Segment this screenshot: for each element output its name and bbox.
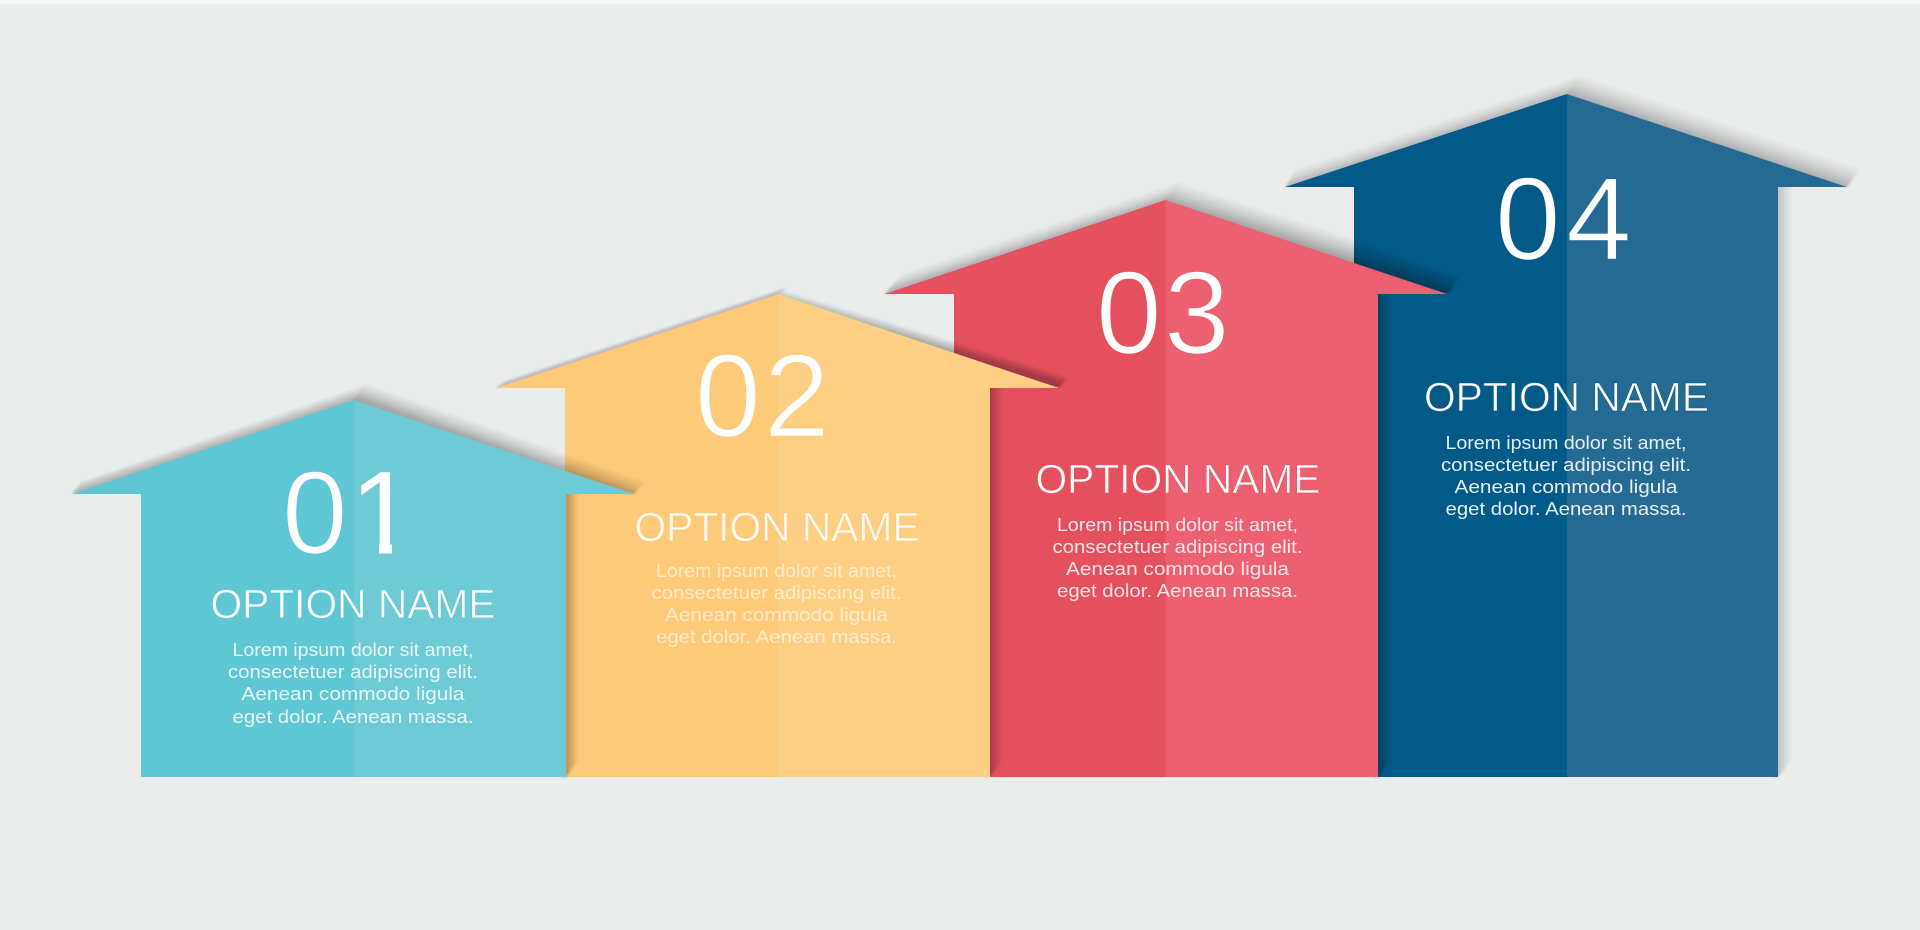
number 03: 0 xyxy=(1096,248,1162,380)
number 04: 0 xyxy=(1495,154,1561,286)
panel: arrow 03 xyxy=(884,180,1459,777)
number 04 xyxy=(1495,154,1632,286)
arrow 02 shape xyxy=(496,294,1059,777)
text block 02: Aenean commodo ligula xyxy=(665,604,889,625)
text block 01: Aenean commodo ligula xyxy=(242,683,465,704)
heading: option name 04: OPTION NAME xyxy=(1424,374,1709,420)
text block 01: consectetuer adipiscing elit. xyxy=(228,661,478,682)
arrow 01 shape xyxy=(72,400,634,777)
text block 01 xyxy=(228,639,478,727)
text block 01: eget dolor. Aenean massa. xyxy=(232,706,474,727)
text block 02: consectetuer adipiscing elit. xyxy=(652,582,902,603)
text block 04: eget dolor. Aenean massa. xyxy=(1446,498,1686,519)
text block 03: Aenean commodo ligula xyxy=(1066,558,1290,579)
number 02 xyxy=(695,330,830,462)
text block 04: consectetuer adipiscing elit. xyxy=(1441,454,1691,475)
number 03 xyxy=(1096,248,1230,380)
text block 02: eget dolor. Aenean massa. xyxy=(656,626,897,647)
arrow 03 shadow xyxy=(884,180,1459,777)
number 04: 4 xyxy=(1566,154,1632,286)
text block 02 xyxy=(652,560,902,647)
panel: arrow 04 xyxy=(1285,75,1861,777)
arrow 02 shadow xyxy=(496,287,1067,777)
heading: option name 01: OPTION NAME xyxy=(210,581,496,627)
arrow 04 shape xyxy=(1285,94,1847,777)
text block 04: Aenean commodo ligula xyxy=(1454,476,1678,497)
text block 04 xyxy=(1441,432,1691,519)
number 01 xyxy=(287,472,392,554)
arrow 04 shadow xyxy=(1285,75,1861,777)
text block 04: Lorem ipsum dolor sit amet, xyxy=(1446,432,1686,453)
text block 03: consectetuer adipiscing elit. xyxy=(1052,536,1302,557)
number 01: 1 xyxy=(350,448,416,580)
heading: option name 02: OPTION NAME xyxy=(634,504,920,550)
arrow 03 shape xyxy=(884,200,1447,777)
panel: arrow 01 xyxy=(72,385,648,777)
number 02: 2 xyxy=(764,330,830,462)
text block 01: Lorem ipsum dolor sit amet, xyxy=(232,639,474,660)
number 01: 0 xyxy=(282,448,348,580)
arrow 01 shadow xyxy=(72,385,648,777)
number 02: 0 xyxy=(695,330,761,462)
text block 02: Lorem ipsum dolor sit amet, xyxy=(656,560,897,581)
text block 03: Lorem ipsum dolor sit amet, xyxy=(1057,514,1298,535)
text block 03 xyxy=(1052,514,1302,601)
panel: arrow 02 xyxy=(496,287,1067,777)
text block 03: eget dolor. Aenean massa. xyxy=(1057,580,1298,601)
heading: option name 03: OPTION NAME xyxy=(1036,456,1320,502)
number 03: 3 xyxy=(1164,248,1230,380)
